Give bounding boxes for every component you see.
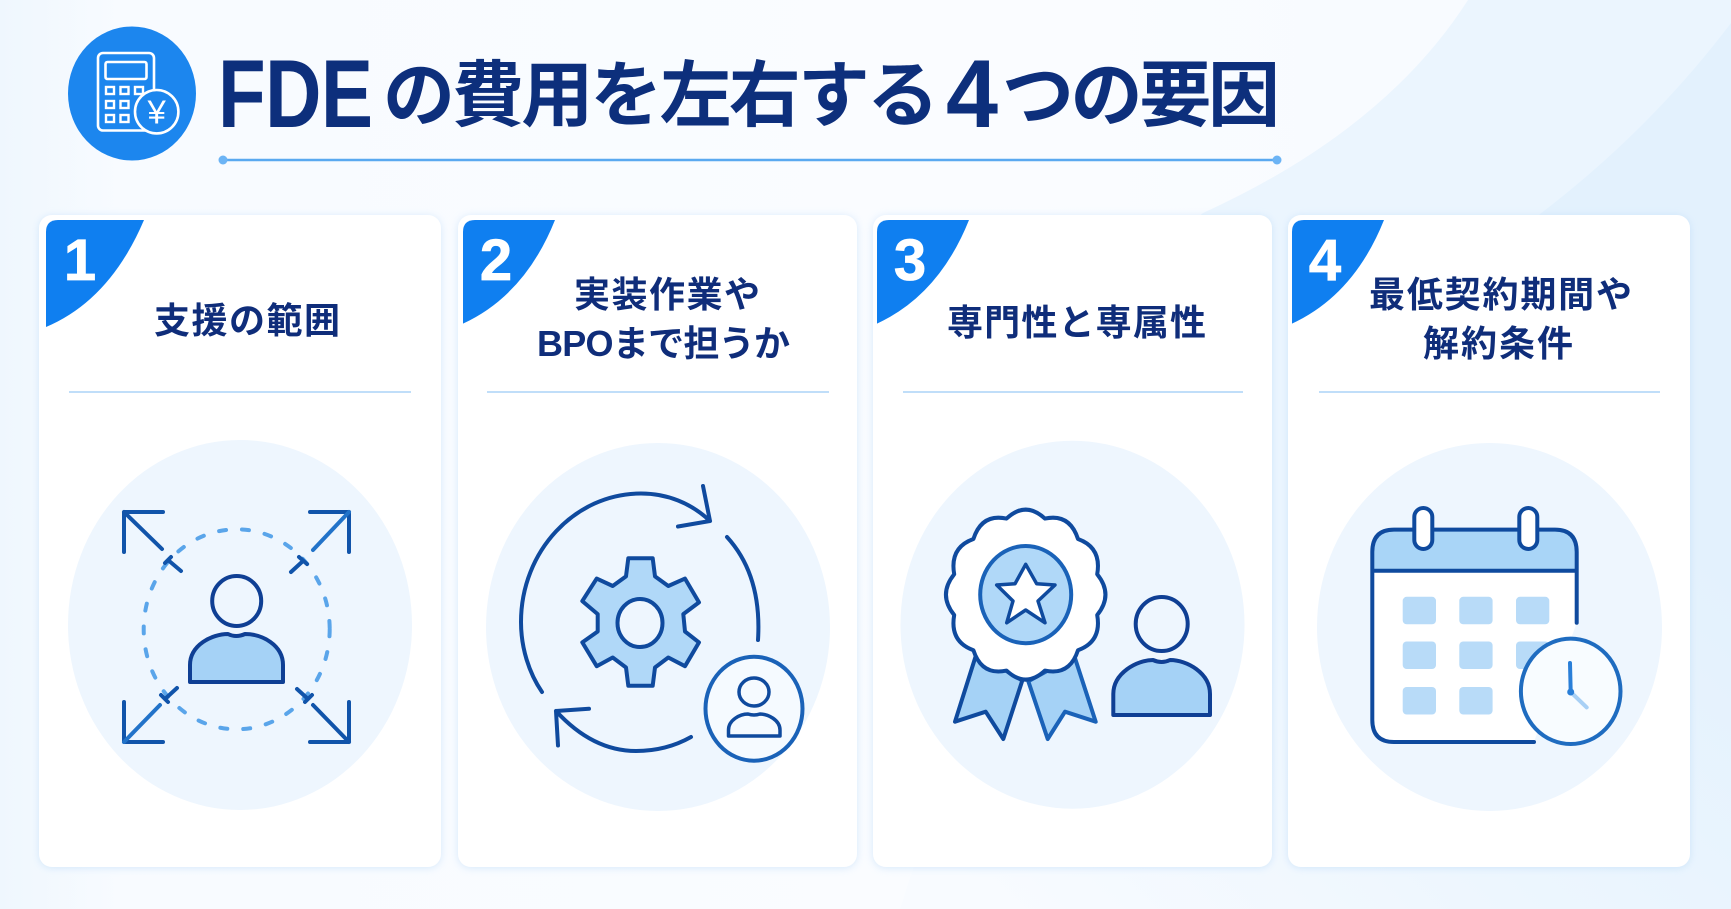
icon: person with expanding arrows (68, 440, 412, 810)
card 4 heading: 解約条件 (1423, 323, 1573, 364)
card 4 heading: 最低契約期間や (1369, 274, 1632, 315)
card 2 heading: BPOまで担うか (537, 323, 790, 364)
number badge 3: 3 (894, 228, 926, 293)
icon: award rosette with person (900, 441, 1244, 809)
panel: card 4 minimum term and cancellation (1288, 215, 1690, 867)
panel: card 2 implementation and BPO (458, 215, 857, 867)
panel: card 3 expertise and exclusivity (873, 215, 1272, 867)
card 2 heading (537, 274, 790, 364)
number badge 1 (46, 220, 144, 327)
icon: gear cycle with user (486, 443, 830, 811)
number badge 4 (1292, 220, 1384, 324)
header icon: calculator with yen: ¥ (147, 94, 167, 130)
title underline (218, 156, 1282, 164)
number badge 2 (463, 220, 555, 324)
number badge 4: 4 (1309, 228, 1341, 293)
card 4 heading (1369, 274, 1632, 364)
header icon: calculator with yen (68, 26, 196, 160)
title: 4 (946, 41, 998, 148)
icon: calendar with clock (1317, 443, 1662, 811)
panel: card 1 support scope (39, 215, 441, 867)
card 3 heading: 専門性と専属性 (947, 302, 1206, 343)
number badge 2: 2 (480, 228, 512, 293)
card 1 heading: 支援の範囲 (154, 300, 340, 341)
title: FDE (218, 39, 373, 148)
title (218, 39, 1280, 148)
title: の費用を左右する (383, 56, 939, 136)
card 2 heading: 実装作業や (574, 274, 760, 315)
number badge 3 (877, 220, 969, 324)
number badge 1: 1 (64, 228, 96, 293)
title: つの要因 (1002, 56, 1280, 136)
